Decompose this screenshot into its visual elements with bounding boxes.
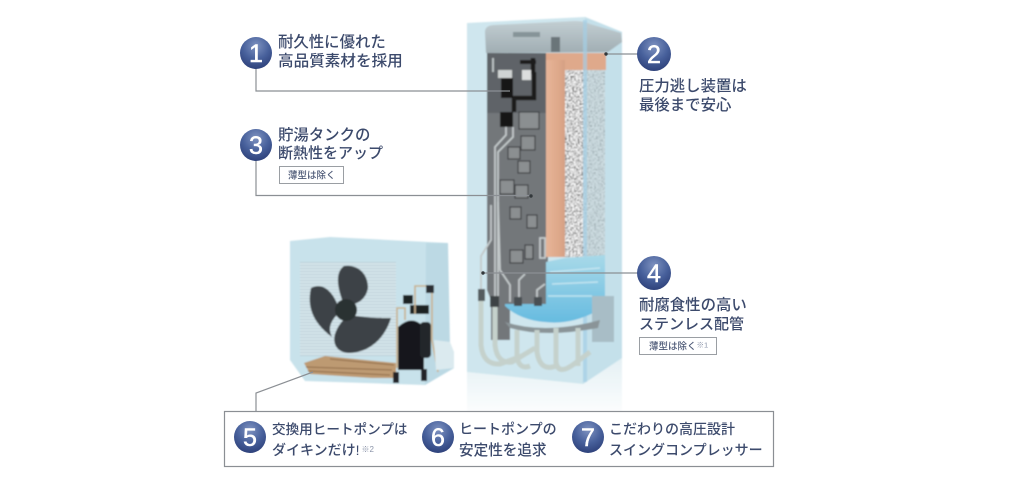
- copper coil: [304, 356, 396, 378]
- badge 6 and text: 6: [431, 424, 445, 452]
- lower flexible pipes: [481, 296, 590, 370]
- badge 7 and text: 7: [581, 424, 595, 452]
- badge 5 and text: 交換用ヒートポンプは: [272, 421, 408, 437]
- leader line 1: [256, 68, 510, 91]
- storage tank unit: [467, 17, 622, 420]
- badge 3 and text: 3: [249, 132, 263, 160]
- badge 7 and text: スイングコンプレッサー: [609, 442, 763, 458]
- badge 2 and text: 圧力逃し装置は: [639, 77, 747, 95]
- leader line 2: [606, 53, 640, 55]
- badge 2 and text: [637, 37, 747, 114]
- badge 4 and text: ステンレス配管: [639, 315, 744, 333]
- badge 5 and text: [234, 421, 408, 458]
- leader dots: [481, 52, 608, 275]
- badge 2 and text: 最後まで安心: [639, 96, 732, 114]
- copper insulation: [546, 53, 565, 257]
- leader line 5: [256, 372, 313, 411]
- stainless pipes: [481, 58, 545, 302]
- note tag 4: 薄型は除く: [649, 342, 697, 352]
- badge 1 and text: 耐久性に優れた: [278, 33, 386, 51]
- foam insulation: [565, 70, 584, 257]
- badge 3 and text: 貯湯タンクの: [278, 126, 370, 144]
- badge 5 and text: ※2: [361, 445, 374, 454]
- badge 3 and text: [240, 126, 383, 162]
- badge 4 and text: [637, 256, 747, 333]
- badge 5 and text: 5: [243, 424, 257, 452]
- tank body shell: [467, 17, 622, 384]
- bottom callout panel: [224, 412, 774, 466]
- leader line 3: [256, 160, 531, 196]
- copper tubing: [397, 286, 438, 372]
- badge 6 and text: 安定性を追求: [459, 442, 547, 459]
- leader line 4: [483, 272, 640, 274]
- fan blades: [310, 266, 391, 353]
- badge 6 and text: [422, 421, 557, 459]
- note tag 4: ※1: [697, 340, 708, 350]
- interior grey panel: [487, 53, 548, 340]
- badge 1 and text: [240, 33, 403, 70]
- badge 7 and text: こだわりの高圧設計: [609, 421, 735, 437]
- badge 1 and text: 1: [249, 40, 263, 68]
- badge 7 and text: [572, 421, 763, 458]
- valves and black piping: [498, 58, 536, 127]
- badge 6 and text: ヒートポンプの: [459, 421, 557, 437]
- badge 4 and text: 耐腐食性の高い: [639, 296, 747, 314]
- note tag 3: 薄型は除く: [288, 170, 336, 182]
- tank reflection: [467, 358, 622, 420]
- badge 3 and text: 断熱性をアップ: [278, 145, 383, 162]
- fan grille: [300, 262, 396, 356]
- badge 1 and text: 高品質素材を採用: [278, 52, 403, 70]
- unit shell: [290, 237, 454, 385]
- outdoor heat pump unit: [290, 237, 454, 385]
- badge 2 and text: 2: [647, 41, 661, 69]
- tank legs base: [592, 296, 614, 342]
- badge 5 and text: ダイキンだけ!: [272, 442, 359, 458]
- compressor: [398, 320, 424, 370]
- water section: [505, 255, 605, 323]
- note tag 3: [280, 166, 344, 184]
- tank top cap: [485, 21, 622, 53]
- badge 4 and text: 4: [647, 260, 661, 288]
- note tag 4: [640, 338, 716, 354]
